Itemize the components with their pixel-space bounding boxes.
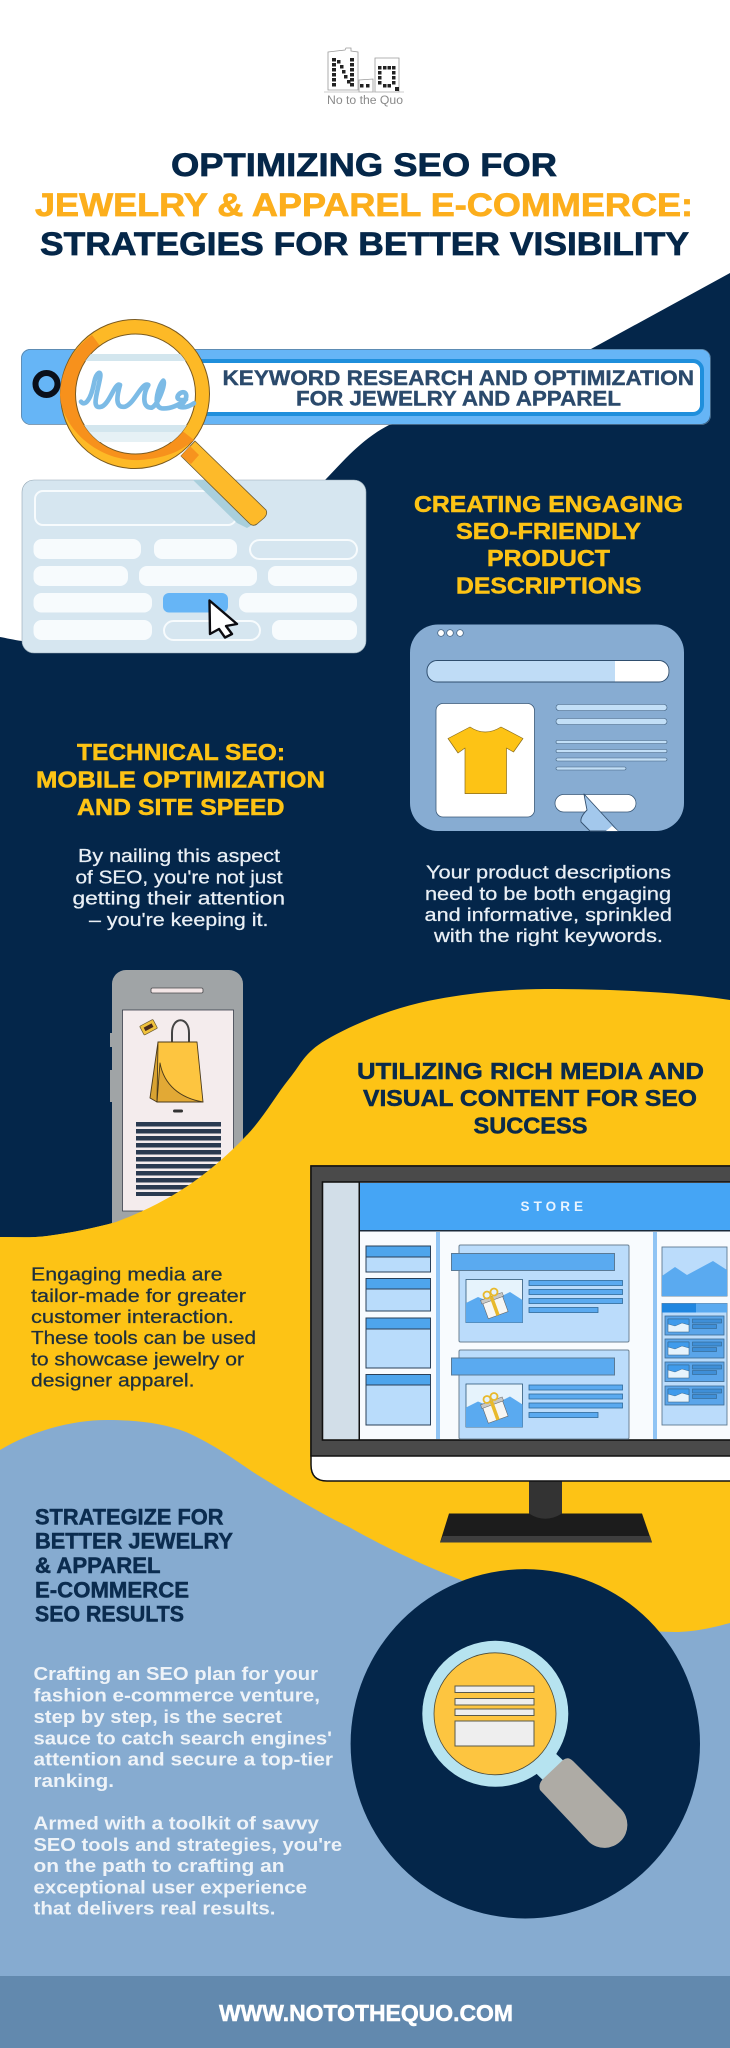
title: OPTIMIZING SEO FOR [171, 147, 557, 183]
icon: t-shirt [448, 727, 523, 794]
heading: rich media: UTILIZING RICH MEDIA AND [357, 1058, 704, 1084]
text: strategize body [34, 1663, 342, 1918]
heading: creating engaging descriptions: DESCRIPTIONS [456, 572, 642, 598]
logo [324, 48, 404, 107]
text: technical seo body: – you're keeping it. [89, 909, 268, 930]
heading: strategize [35, 1504, 233, 1626]
panel: product page window [410, 624, 684, 831]
text: rich media body [31, 1264, 256, 1390]
yellow wave overlap over phone [0, 1135, 247, 1300]
heading: rich media: VISUAL CONTENT FOR SEO [363, 1085, 697, 1111]
heading: technical seo: TECHNICAL SEO: [77, 739, 285, 765]
heading: keyword research [222, 366, 694, 410]
title [35, 147, 693, 262]
text: strategize body: that delivers real results. [34, 1898, 276, 1918]
heading: technical seo: AND SITE SPEED [77, 794, 284, 820]
monitor stand [440, 1480, 652, 1542]
title: STRATEGIES FOR BETTER VISIBILITY [40, 226, 689, 262]
icon: desktop monitor with store page [311, 1166, 730, 1542]
heading: creating engaging descriptions: CREATING ENGAGING [414, 491, 683, 517]
heading: creating engaging descriptions: PRODUCT [487, 545, 610, 571]
text: strategize body: sauce to catch search engines' [34, 1728, 332, 1748]
icon: navy circle with magnifier [351, 1569, 700, 1919]
heading: creating engaging descriptions [414, 491, 683, 598]
icon: large magnifying glass [60, 320, 267, 528]
heading: strategize: STRATEGIZE FOR [35, 1504, 224, 1530]
text: product descriptions body [424, 862, 672, 946]
text: product descriptions body: and informative, sprinkled [424, 904, 672, 925]
text: strategize body: attention and secure a top-tier [34, 1748, 333, 1770]
label: store: STORE [520, 1199, 583, 1214]
store sidebar list [366, 1246, 430, 1425]
text: technical seo body [72, 845, 285, 930]
text: product descriptions body: Your product descriptions [426, 862, 671, 882]
icon: small search glyph [36, 373, 58, 395]
logo: No to the Quo [327, 95, 403, 107]
text: rich media body: customer interaction. [31, 1306, 234, 1327]
text lines on phone [136, 1122, 221, 1196]
text: rich media body: to showcase jewelry or [31, 1348, 244, 1370]
text: product descriptions body: need to be both engaging [425, 883, 671, 904]
panel: search results window [22, 480, 366, 653]
heading: technical seo [36, 739, 325, 820]
icon: tag [140, 1019, 158, 1035]
text: rich media body: These tools can be used [31, 1327, 256, 1348]
text: product descriptions body: with the right keywords. [433, 925, 663, 946]
text: strategize body: exceptional user experience [34, 1876, 307, 1898]
text: strategize body: Crafting an SEO plan for your [34, 1663, 318, 1684]
text: technical seo body: of SEO, you're not just [76, 866, 282, 888]
text: rich media body: designer apparel. [31, 1370, 194, 1390]
text: strategize body: fashion e-commerce venture, [34, 1684, 320, 1706]
text: strategize body: Armed with a toolkit of savvy [34, 1812, 320, 1834]
heading: rich media [357, 1058, 704, 1138]
heading: strategize: & APPAREL [35, 1553, 160, 1578]
text: strategize body: SEO tools and strategies, you're [34, 1834, 342, 1855]
heading: creating engaging descriptions: SEO-FRIENDLY [456, 518, 641, 544]
text: strategize body: on the path to crafting an [34, 1855, 284, 1876]
store product card one [452, 1245, 629, 1342]
store right thumbnails list [662, 1304, 727, 1425]
store product card two [452, 1350, 629, 1439]
heading: strategize: BETTER JEWELRY [35, 1528, 233, 1554]
footer url: WWW.NOTOTHEQUO.COM [219, 2000, 513, 2026]
background: light blue wave [0, 1420, 730, 2048]
background: navy wave [0, 273, 730, 1300]
store right chart tile [662, 1247, 727, 1296]
text: rich media body: tailor-made for greater [31, 1285, 246, 1306]
panel: keyword search bar [21, 349, 710, 424]
text: technical seo body: getting their attention [72, 888, 285, 908]
icon: cursor arrow [210, 600, 237, 638]
icon: pointing hand [581, 794, 618, 831]
heading: strategize: E-COMMERCE [35, 1578, 189, 1602]
icon: shopping bag [150, 1020, 203, 1102]
heading: rich media: SUCCESS [474, 1112, 588, 1138]
heading: technical seo: MOBILE OPTIMIZATION [36, 766, 325, 792]
title: JEWELRY & APPAREL E-COMMERCE: [35, 187, 693, 223]
icon: handwriting in lens [81, 373, 194, 408]
text: strategize body: ranking. [34, 1770, 114, 1791]
text: strategize body: step by step, is the secret [34, 1706, 282, 1727]
heading: strategize: SEO RESULTS [35, 1602, 184, 1626]
footer band [0, 1976, 730, 2048]
text: rich media body: Engaging media are [31, 1264, 223, 1284]
text: technical seo body: By nailing this aspect [78, 845, 280, 866]
magnifier handle [539, 1758, 627, 1848]
heading: keyword research: FOR JEWELRY AND APPAREL [296, 386, 621, 410]
heading: keyword research: KEYWORD RESEARCH AND OPTIMIZATION [222, 366, 694, 390]
icon: phone with shopping bag [110, 970, 243, 1240]
background: yellow wave [0, 989, 730, 1700]
